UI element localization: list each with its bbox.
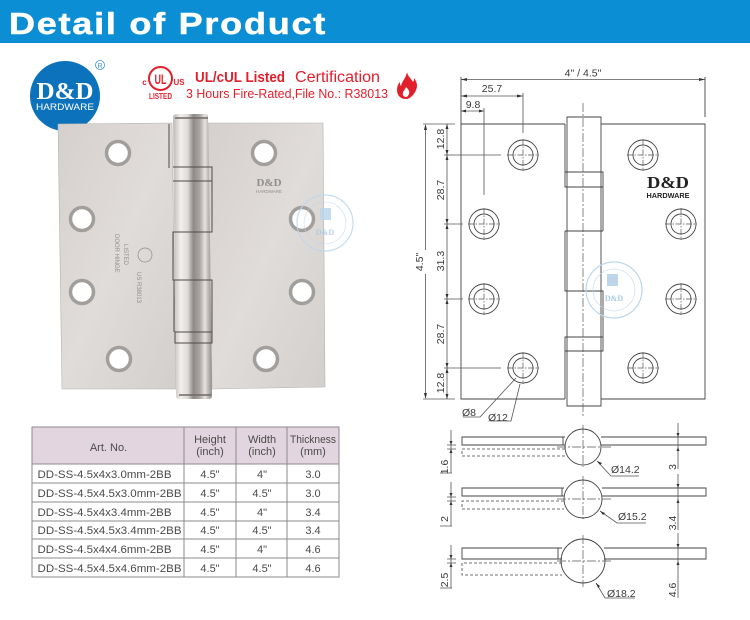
header row (90, 434, 336, 458)
icon: UL listed mark: UL (154, 71, 167, 87)
vertical dimensions: 31.3 (435, 251, 447, 271)
section: 3.4 mm: 2 (439, 516, 451, 522)
stamp: UL marks: DOOR HINGE (113, 234, 119, 273)
value columns: 3.4 (305, 525, 321, 537)
section: 3.0 mm: Ø14.2 (611, 464, 640, 476)
vertical dimensions: 12.8 (435, 129, 447, 149)
right leaf (208, 123, 325, 389)
plate outline (461, 77, 705, 399)
technical drawing: front view (414, 68, 705, 424)
value columns: 4.5" (252, 525, 272, 537)
barrel (173, 114, 212, 399)
certification (142, 67, 417, 101)
logo on drawing: D&D (647, 173, 689, 192)
value columns: 3.4 (305, 507, 321, 519)
watermark: drawing: D&D (605, 294, 623, 303)
value columns: 3.0 (305, 469, 321, 481)
horizontal dimensions (461, 68, 705, 195)
value columns: 4.5" (200, 563, 220, 575)
vertical dimensions: 4.5" (414, 253, 426, 271)
watermark: photo (297, 195, 353, 251)
header row: Thickness (290, 434, 336, 446)
model column: DD-SS-4.5x4x3.0mm-2BB (38, 469, 172, 481)
model column (38, 469, 182, 575)
stamp: D&D (256, 177, 282, 194)
icon: UL listed mark: LISTED (149, 92, 172, 101)
header row: (mm) (300, 446, 326, 458)
header row: Height (194, 434, 226, 446)
section: 3.0 mm: 3 (667, 464, 679, 470)
stamp: UL marks: LISTED (122, 244, 128, 266)
icon: flame (397, 72, 417, 99)
header row: (inch) (248, 446, 276, 458)
value columns (200, 469, 321, 575)
stamp: D&D: HARDWARE (256, 189, 282, 194)
vertical dimensions: 28.7 (435, 180, 447, 200)
value columns: 4.5" (200, 525, 220, 537)
value columns: 4.5" (200, 488, 220, 500)
section: 4.6 mm: 4.6 (667, 583, 679, 597)
model column: DD-SS-4.5x4x3.4mm-2BB (38, 507, 172, 519)
value columns: 4.5" (200, 469, 220, 481)
certification text: Certification (295, 69, 380, 86)
stamp: UL marks (113, 234, 152, 304)
section: 4.6 mm (439, 533, 706, 600)
section: 3.4 mm (439, 474, 706, 530)
icon: UL listed mark (142, 67, 185, 101)
section views (439, 423, 706, 600)
mounting holes (468, 139, 697, 384)
section: 3.4 mm: 3.4 (667, 516, 679, 530)
logo: D&D Hardware: HARDWARE (36, 102, 94, 113)
section: 3.0 mm: 1.6 (439, 460, 451, 474)
hole diameter callouts (462, 378, 520, 424)
value columns: 4" (257, 544, 267, 556)
spec table (32, 427, 339, 577)
value columns: 4.5" (200, 507, 220, 519)
product photo: hinge (58, 114, 325, 399)
horizontal dimensions: 25.7 (482, 83, 502, 95)
logo: D&D Hardware: D&D (36, 79, 94, 105)
stamp: D&D: D&D (256, 177, 282, 189)
model column: DD-SS-4.5x4.5x4.6mm-2BB (38, 563, 182, 575)
logo on drawing: HARDWARE (646, 191, 690, 200)
stamp: UL marks: US R38013 (135, 272, 141, 304)
section: 4.6 mm: Ø18.2 (607, 588, 636, 600)
horizontal dimensions: 9.8 (466, 99, 480, 111)
icon: UL listed mark: US (173, 78, 185, 87)
vertical dimensions: 12.8 (435, 373, 447, 393)
header row: (inch) (196, 446, 224, 458)
title banner (0, 0, 750, 43)
watermark: drawing (586, 262, 642, 318)
certification text: 3 Hours Fire-Rated,File No.: R38013 (186, 87, 388, 101)
certification text (186, 69, 388, 101)
left leaf (58, 123, 176, 389)
value columns: 3.0 (305, 488, 321, 500)
vertical dimensions: 28.7 (435, 324, 447, 344)
section: 3.0 mm (439, 423, 706, 476)
value columns: 4.6 (305, 544, 321, 556)
horizontal dimensions: 4" / 4.5" (565, 68, 602, 80)
value columns: 4.5" (200, 544, 220, 556)
logo: D&D Hardware: R (97, 63, 103, 70)
hole diameter callouts: Ø8 (462, 407, 476, 419)
model column: DD-SS-4.5x4.5x3.4mm-2BB (38, 525, 182, 537)
watermark: photo: D&D (316, 228, 334, 237)
logo: D&D Hardware (30, 60, 104, 131)
certification text: UL/cUL Listed (195, 69, 285, 86)
section: 4.6 mm: 2.5 (439, 573, 451, 587)
title banner: Detail of Product (9, 6, 327, 41)
vertical dimensions (414, 124, 501, 399)
value columns: 4.6 (305, 563, 321, 575)
value columns: 4" (257, 507, 267, 519)
section: 3.4 mm: Ø15.2 (618, 511, 647, 523)
hole diameter callouts: Ø12 (488, 412, 508, 424)
model column: DD-SS-4.5x4.5x3.0mm-2BB (38, 488, 182, 500)
header row: Art. No. (90, 442, 127, 454)
model column: DD-SS-4.5x4x4.6mm-2BB (38, 544, 172, 556)
icon: UL listed mark: c (142, 78, 147, 87)
value columns: 4.5" (252, 563, 272, 575)
header row: Width (248, 434, 276, 446)
value columns: 4.5" (252, 488, 272, 500)
screw holes (70, 142, 314, 370)
logo on drawing (646, 173, 690, 200)
barrel outline (565, 117, 603, 406)
value columns: 4" (257, 469, 267, 481)
